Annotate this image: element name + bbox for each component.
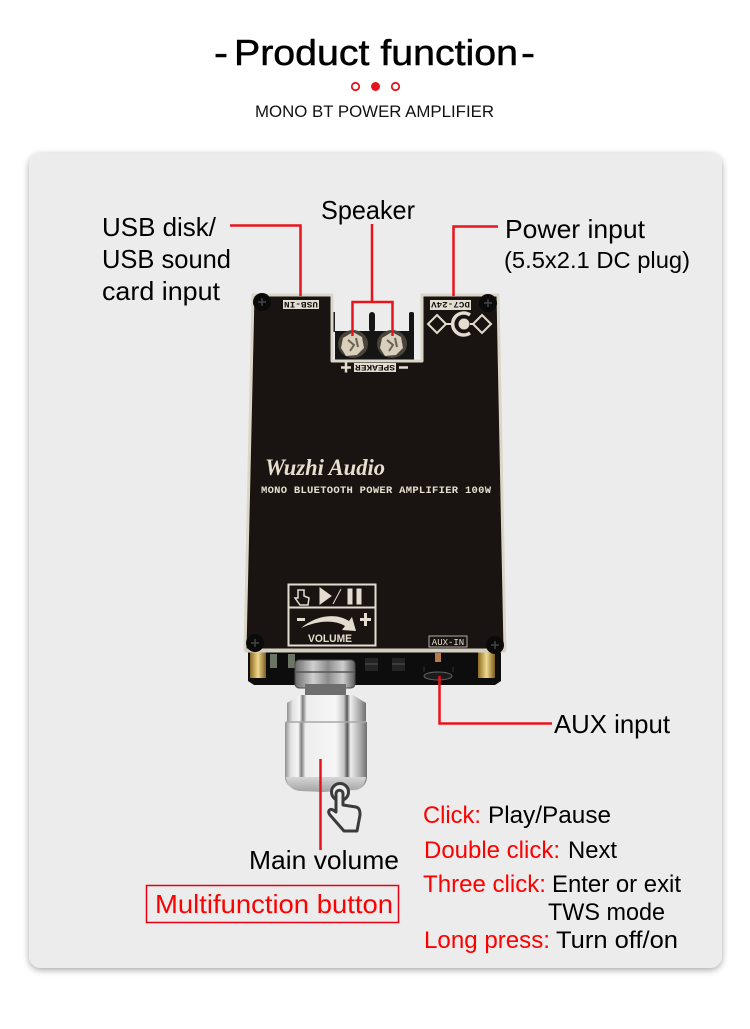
icon: play pause [320, 588, 361, 604]
label: power input [504, 214, 690, 273]
line: aux [440, 676, 552, 724]
button functions list: Next [568, 837, 617, 864]
gold standoffs [250, 652, 495, 678]
label: DC7-24V: DC7-24V [430, 299, 470, 309]
volume control legend [288, 584, 376, 646]
button functions list: Play/Pause [488, 802, 611, 829]
label: speaker polarity: SPEAKER [354, 362, 395, 372]
title: - [521, 32, 535, 73]
pcb front edge [248, 650, 501, 685]
label: usb input: USB sound [102, 244, 231, 274]
callout: multifunction button: Multifunction button [155, 889, 393, 919]
speaker terminal block [332, 312, 414, 360]
icon: volume arrow [297, 613, 371, 631]
subtitle: MONO BT POWER AMPLIFIER [255, 102, 494, 121]
board top plate [245, 295, 505, 650]
label: aux input: AUX input [554, 709, 671, 739]
board model text: MONO BLUETOOTH POWER AMPLIFIER 100W [261, 485, 492, 497]
line: main volume [319, 759, 322, 850]
icon: DC polarity [428, 313, 491, 335]
label: usb input [102, 212, 231, 306]
button functions list: TWS mode [548, 899, 665, 926]
title dots [352, 82, 399, 91]
label: usb input: USB disk/ [102, 212, 217, 242]
brand logo: Wuzhi Audio [265, 455, 385, 480]
label: AUX-IN: AUX-IN [432, 638, 464, 648]
line: USB [230, 226, 300, 296]
label: power input: (5.5x2.1 DC plug) [504, 247, 690, 273]
product: amplifier board [245, 293, 505, 685]
screws [246, 293, 504, 654]
button functions list: Enter or exit [552, 871, 681, 898]
line: power [454, 226, 498, 296]
label: main volume: Main volume [249, 845, 399, 875]
icon: hand [295, 590, 309, 605]
label: USB-IN: USB-IN [284, 299, 318, 309]
button functions list: Turn off/on [556, 927, 678, 954]
button functions list: Click: [423, 802, 481, 829]
button functions list: Double click: [424, 837, 560, 864]
knob: multifunction button [285, 660, 367, 792]
panel: product function [29, 153, 722, 968]
volume control legend: VOLUME [308, 633, 352, 645]
label: speaker: Speaker [321, 195, 415, 225]
label: usb input: card input [102, 276, 221, 306]
title: Product function [234, 32, 518, 73]
button functions list [423, 802, 681, 954]
label: power input: Power input [505, 214, 646, 244]
button functions list: Three click: [423, 871, 546, 898]
button functions list: Long press: [424, 927, 550, 954]
line: speaker [352, 224, 392, 336]
callout lines [230, 224, 552, 850]
title: - [214, 32, 228, 73]
icon: pointing hand [329, 784, 360, 831]
label: speaker polarity [341, 362, 408, 372]
